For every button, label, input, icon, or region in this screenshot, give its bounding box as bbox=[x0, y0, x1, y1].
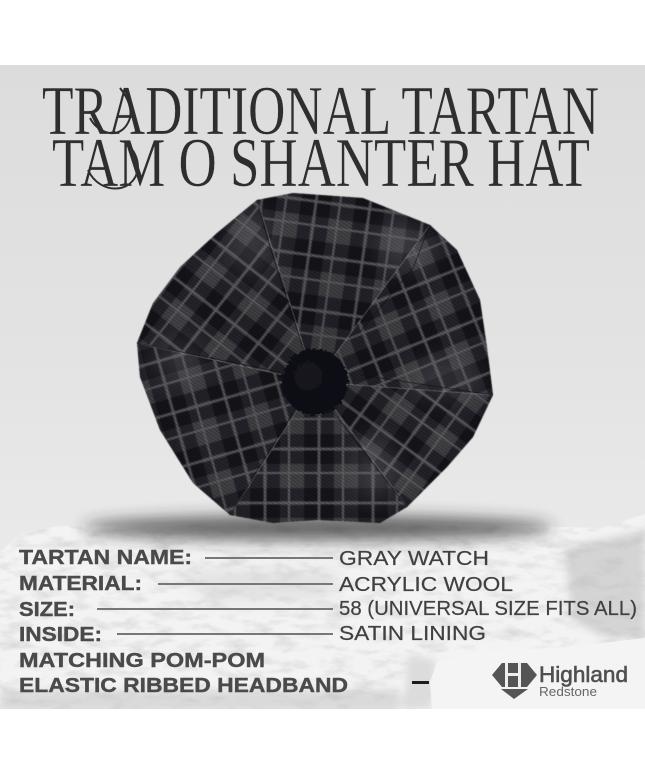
hat shadow bbox=[83, 516, 553, 540]
feature: elastic ribbed headband: ELASTIC RIBBED HEADBAND bbox=[19, 675, 348, 697]
logo: Highland Redstone bbox=[492, 662, 628, 699]
spec row: inside: SATIN LINING bbox=[339, 622, 486, 645]
logo wordmark: Highland bbox=[539, 662, 628, 687]
hat light patches bbox=[147, 211, 479, 504]
stone shading bbox=[0, 515, 645, 712]
hat panel: right bbox=[315, 225, 493, 395]
title flourishes bbox=[88, 88, 138, 189]
spec row: tartan name: TARTAN NAME: bbox=[19, 547, 192, 569]
title bbox=[42, 73, 599, 202]
spec row: size: SIZE: bbox=[19, 599, 75, 621]
spec row: inside: INSIDE: bbox=[19, 624, 102, 646]
feature: matching pom-pom: MATCHING POM-POM bbox=[19, 650, 265, 672]
hat fabric texture bbox=[137, 193, 493, 523]
spec row: tartan name: GRAY WATCH bbox=[339, 547, 489, 570]
spec row: material: MATERIAL: bbox=[19, 573, 142, 595]
spec row: size: 58 (UNIVERSAL SIZE FITS ALL) bbox=[339, 597, 637, 620]
spec row: material: ACRYLIC WOOL bbox=[339, 573, 513, 596]
spec row: tartan name bbox=[19, 547, 489, 570]
hat panel: top bbox=[257, 193, 430, 382]
spec row: material bbox=[19, 573, 513, 596]
logo subtitle: Redstone bbox=[539, 684, 597, 699]
hat panel: left bbox=[137, 343, 315, 515]
spec row: size bbox=[19, 597, 637, 621]
hat panel: lower right bbox=[315, 382, 493, 507]
hat seams bbox=[137, 200, 493, 515]
spec row: inside bbox=[19, 622, 486, 646]
tartan hat bbox=[137, 193, 493, 523]
hat shading bbox=[137, 193, 493, 523]
pom-pom bbox=[282, 349, 348, 415]
stone podium bbox=[0, 514, 645, 712]
hat panel: bottom bbox=[230, 382, 407, 523]
logo icon bbox=[492, 662, 537, 699]
hat panel: upper left bbox=[137, 200, 315, 382]
